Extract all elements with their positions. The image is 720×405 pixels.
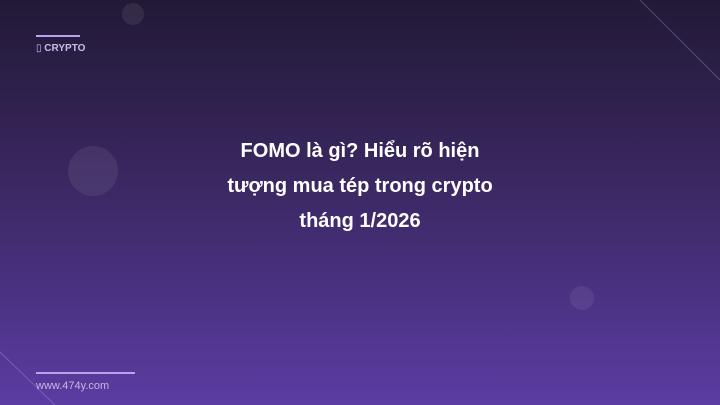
title: tượng mua tép trong crypto [227, 175, 493, 197]
title: FOMO là gì? Hiểu rõ hiện [241, 140, 479, 162]
footer: www.474y.com [36, 380, 109, 392]
title: tháng 1/2026 [299, 210, 421, 232]
category label: ▯ CRYPTO [36, 43, 85, 54]
title [227, 140, 493, 232]
